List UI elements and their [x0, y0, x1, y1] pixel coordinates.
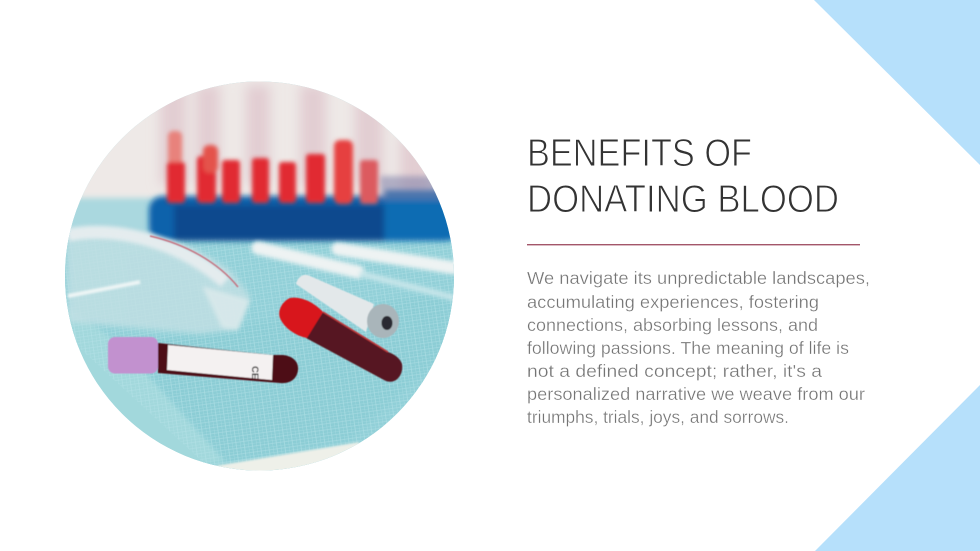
photo background — [60, 78, 460, 478]
body paragraph: following passions. The meaning of life is — [527, 338, 849, 358]
body paragraph: accumulating experiences, fostering — [527, 292, 819, 312]
corner triangle: top right — [814, 0, 980, 165]
blurred red tubes — [167, 131, 378, 204]
body paragraph: We navigate its unpredictable landscapes, — [527, 268, 870, 288]
corner triangle: bottom right — [815, 385, 980, 551]
body paragraph — [527, 268, 870, 427]
body paragraph: not a defined concept; rather, it's a — [527, 361, 822, 381]
red capped blood tube — [279, 298, 402, 382]
circular photo: blood sample tubes on a teal tray — [60, 78, 460, 478]
body paragraph: connections, absorbing lessons, and — [527, 315, 818, 335]
title — [527, 132, 839, 221]
title: DONATING BLOOD — [527, 178, 839, 221]
clear safety glasses — [66, 229, 250, 334]
title: BENEFITS OF — [527, 132, 752, 175]
purple capped blood tube with label: CE — [249, 366, 260, 379]
divider under title — [527, 244, 860, 245]
body paragraph: triumphs, trials, joys, and sorrows. — [527, 407, 789, 427]
blurred clear tube tops — [160, 85, 430, 195]
purple capped blood tube with label — [108, 337, 298, 383]
blurred syringes — [258, 248, 455, 298]
blue tube rack — [149, 176, 459, 241]
teal tray with mesh texture — [60, 238, 460, 478]
grey capped tube — [296, 275, 399, 338]
body paragraph: personalized narrative we weave from our — [527, 384, 865, 404]
